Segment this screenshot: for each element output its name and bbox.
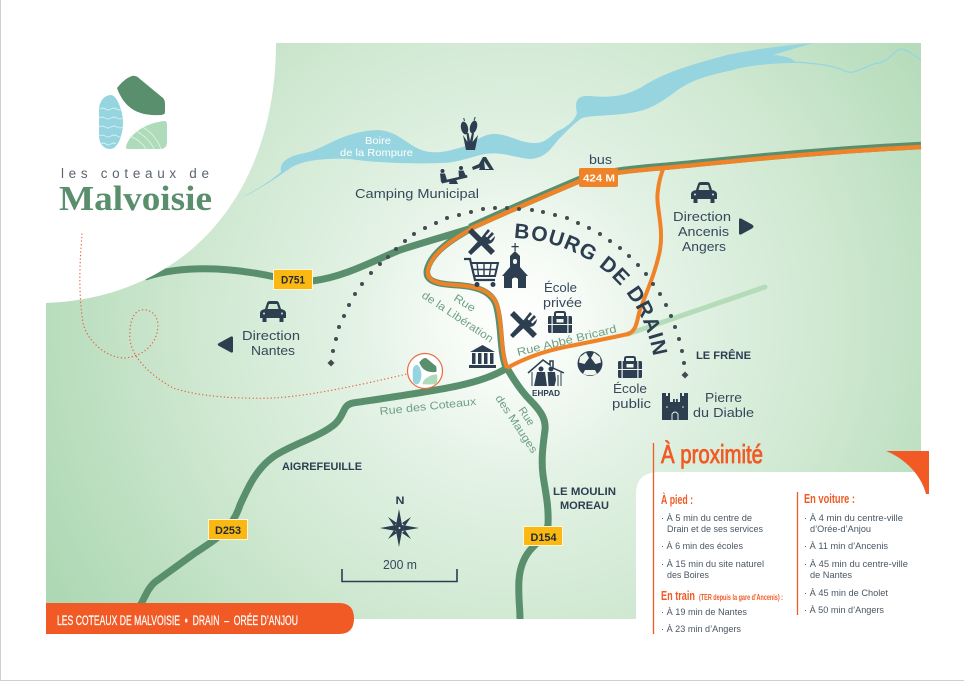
icon: church xyxy=(502,243,528,288)
label: Le Moulin Moreau xyxy=(553,486,616,512)
road: D154 and Rue des Mauges xyxy=(507,368,548,619)
bus badge: 424 M: 424 M xyxy=(583,172,615,184)
section: En voiture: · À 50 min d’Angers xyxy=(804,605,884,616)
label: École public: École xyxy=(613,381,647,396)
label: École public: public xyxy=(612,396,652,411)
road badge: D751 xyxy=(274,270,312,290)
road badge: D253 xyxy=(208,520,248,540)
section: En train: · À 23 min d’Angers xyxy=(661,624,741,635)
section: En voiture: d’Orée-d’Anjou xyxy=(810,524,871,535)
label: École privée: École xyxy=(544,280,577,295)
icon: car east xyxy=(691,182,717,203)
icon: restaurant centre xyxy=(510,311,537,338)
icon: restaurant north xyxy=(468,228,495,255)
label: Direction Ancenis Angers: Direction xyxy=(673,209,731,224)
section: En train: (TER depuis la gare d’Ancenis) : xyxy=(699,593,783,602)
scale bar xyxy=(342,557,457,582)
street label: Rue Abbé Bricard: Rue Abbé Bricard xyxy=(516,323,618,359)
label: Direction Nantes: Direction xyxy=(242,328,300,343)
section: À pied: À pied : xyxy=(661,492,693,507)
label: Boire de la Rompure: Boire xyxy=(365,135,391,147)
section: À pied: · À 5 min du centre de xyxy=(661,513,752,524)
section: En voiture: · À 4 min du centre-ville xyxy=(804,513,903,524)
road: D253 and Rue des Coteaux xyxy=(140,368,507,606)
icon: castle xyxy=(662,393,688,420)
label: Direction Ancenis Angers: Ancenis xyxy=(678,224,730,239)
logo text: Malvoisie: Malvoisie xyxy=(59,179,212,218)
icon: tent xyxy=(472,157,494,170)
dotted arc around Bourg de Drain xyxy=(328,206,688,378)
road badge: D154 xyxy=(524,526,562,546)
icon: seesaw xyxy=(440,166,468,184)
label: Le Moulin Moreau: LE MOULIN xyxy=(553,486,616,498)
label: Pierre du Diable: du Diable xyxy=(693,405,754,420)
label: Direction Nantes: Nantes xyxy=(251,343,296,358)
bus badge: 424 M xyxy=(579,168,618,187)
panel: À proximité xyxy=(636,439,929,640)
label: bus: bus xyxy=(589,152,613,167)
icon: shopping cart xyxy=(464,259,498,287)
section: En voiture: · À 11 min d’Ancenis xyxy=(804,541,888,552)
section: En voiture xyxy=(804,491,908,616)
logo text: les coteaux de: les coteaux de xyxy=(61,166,209,181)
section: À pied: · À 15 min du site naturel xyxy=(661,559,764,570)
orange corner xyxy=(886,451,929,494)
label: Le Frêne: LE FRÊNE xyxy=(696,349,751,362)
icon: reeds xyxy=(460,117,478,150)
street label: Rue des Mauges: des Mauges xyxy=(492,393,540,456)
section: En voiture: En voiture : xyxy=(804,491,855,506)
white logo corner xyxy=(46,43,276,303)
icon: football xyxy=(578,351,602,376)
road badge: D253: D253 xyxy=(215,525,241,537)
main road with bus line xyxy=(427,146,921,368)
label: École privée: privée xyxy=(543,295,582,310)
heading: À proximité: À proximité xyxy=(661,439,763,469)
label: Aigrefeuille: AIGREFEUILLE xyxy=(282,461,362,473)
title: Bourg de Drain: BOURG DE DRAIN xyxy=(515,224,668,355)
map background xyxy=(46,43,921,619)
label: Camping Municipal: Camping Municipal xyxy=(355,186,479,201)
section: En voiture: · À 45 min de Cholet xyxy=(804,588,888,599)
label: École public xyxy=(612,381,652,411)
road badge: D751: D751 xyxy=(281,274,305,286)
section: En voiture: · À 45 min du centre-ville xyxy=(804,559,908,570)
road: D751 xyxy=(145,228,472,281)
footer banner xyxy=(46,603,354,634)
icon: EHPAD house xyxy=(528,360,564,398)
compass rose: N xyxy=(396,495,405,507)
street label: Rue de la Libération: de la Libération xyxy=(419,289,495,345)
dotted route to the site xyxy=(80,234,407,398)
label: Pierre du Diable xyxy=(693,390,754,420)
icon: museum / town hall xyxy=(469,345,496,368)
section: En train: En train xyxy=(661,588,695,603)
road badge: D154: D154 xyxy=(530,532,557,544)
label: École privée xyxy=(543,280,582,310)
street label: Rue de la Libération: Rue xyxy=(451,292,477,315)
label: Direction Ancenis Angers xyxy=(673,209,731,254)
street label: Rue des Coteaux: Rue des Coteaux xyxy=(379,396,477,418)
scale bar: 200 m xyxy=(383,557,417,572)
site marker xyxy=(408,354,442,388)
label: Boire de la Rompure: de la Rompure xyxy=(340,147,413,159)
label: EHPAD: EHPAD xyxy=(532,388,560,398)
label: Boire de la Rompure xyxy=(340,135,413,159)
icon: car west xyxy=(260,301,286,322)
label: Direction Ancenis Angers: Angers xyxy=(682,239,727,254)
river: Boire de la Rompure xyxy=(240,43,921,198)
section: En train: · À 19 min de Nantes xyxy=(661,607,747,618)
light road: Rue Abbé Bricard extension xyxy=(628,287,765,334)
label: Direction Nantes xyxy=(242,328,300,358)
section: À pied: · À 6 min des écoles xyxy=(661,541,743,552)
section: À pied: Drain et de ses services xyxy=(667,524,763,535)
section: À pied: des Boires xyxy=(667,570,709,581)
arrow: east xyxy=(739,218,754,235)
compass rose xyxy=(380,495,419,547)
icon: briefcase public school xyxy=(618,357,642,378)
footer banner: LES COTEAUX DE MALVOISIE • DRAIN – ORÉE D’ANJOU xyxy=(57,612,298,628)
section: En train xyxy=(661,588,783,635)
section: En voiture: de Nantes xyxy=(810,570,852,581)
label: Pierre du Diable: Pierre xyxy=(705,390,742,405)
arrow: west xyxy=(218,336,233,353)
label: Le Moulin Moreau: MOREAU xyxy=(560,500,609,512)
section: À pied xyxy=(661,492,764,581)
street label: Rue des Mauges: Rue xyxy=(516,405,537,428)
logo: les coteaux de Malvoisie xyxy=(59,76,212,218)
icon: briefcase private school xyxy=(548,312,572,333)
